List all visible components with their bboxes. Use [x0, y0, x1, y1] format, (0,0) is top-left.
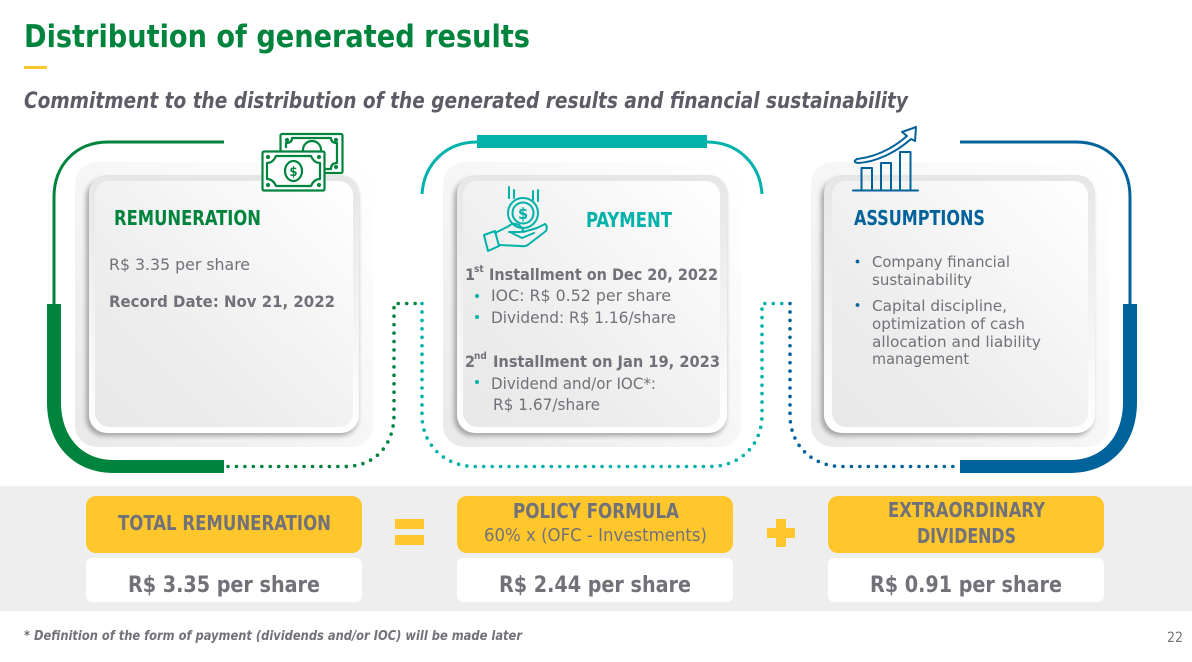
value: policy formula: R$ 2.44 per share [499, 573, 691, 598]
subtitle: Commitment to the distribution of the generated results and financial sustainability [24, 89, 909, 114]
value: total remuneration [86, 558, 362, 602]
value: extraordinary dividends [828, 558, 1104, 602]
text: first installment [465, 264, 718, 327]
text: second installment: nd [474, 351, 487, 362]
list: assumptions: management [872, 350, 970, 368]
icon: hand with coin: $ [518, 204, 528, 223]
title: Distribution of generated results [24, 19, 530, 55]
text: second installment: Installment on Jan 19, 2023 [493, 352, 720, 371]
list: assumptions [856, 253, 1041, 368]
text: first installment: Dividend: R$ 1.16/share [491, 308, 676, 327]
page number: 22 [1167, 630, 1183, 646]
box: total remuneration: TOTAL REMUNERATION [118, 511, 331, 535]
box: total remuneration [86, 496, 362, 553]
dotted connectors [228, 304, 958, 466]
icon: hand with coin [484, 187, 547, 251]
text: first installment: st [474, 264, 484, 275]
icon: growth chart [853, 127, 918, 190]
heading: remuneration: REMUNERATION [114, 206, 261, 230]
panel: assumptions [811, 162, 1109, 447]
text: second installment: R$ 1.67/share [493, 395, 600, 414]
icon: banknotes: $ [289, 165, 298, 180]
box: policy formula [457, 496, 733, 553]
box: policy formula: POLICY FORMULA [513, 499, 679, 523]
panel: payment [443, 162, 741, 447]
box: extraordinary dividends: DIVIDENDS [917, 524, 1016, 548]
box: extraordinary dividends: EXTRAORDINARY [888, 498, 1046, 522]
icon: equals sign [395, 519, 424, 545]
icon: banknotes [262, 134, 342, 190]
text: first installment: Installment on Dec 20, 2022 [489, 265, 718, 284]
heading: assumptions: ASSUMPTIONS [854, 206, 985, 230]
list: assumptions: Company financial [872, 253, 1010, 271]
value: total remuneration: R$ 3.35 per share [128, 573, 320, 598]
list: assumptions: optimization of cash [872, 315, 1025, 333]
text: first installment: IOC: R$ 0.52 per share [491, 286, 671, 305]
text: second installment [465, 351, 720, 414]
text: record date: Record Date: Nov 21, 2022 [109, 292, 335, 311]
band: formula [0, 486, 1192, 611]
value: extraordinary dividends: R$ 0.91 per share [870, 573, 1062, 598]
footnote: * Definition of the form of payment (dividends and/or IOC) will be made later [24, 629, 523, 644]
bracket: assumptions [960, 142, 1137, 473]
heading: payment: PAYMENT [586, 208, 673, 232]
list: assumptions: allocation and liability [872, 333, 1041, 351]
text: amount per share: R$ 3.35 per share [109, 255, 250, 274]
box: policy formula: 60% x (OFC - Investments) [484, 525, 707, 546]
title accent bar [24, 66, 47, 69]
box: extraordinary dividends [828, 496, 1104, 553]
bracket: payment [422, 135, 762, 194]
text: second installment: 2 [465, 352, 475, 371]
value: policy formula [457, 558, 733, 602]
list: assumptions: Capital discipline, [872, 297, 1007, 315]
text: second installment: Dividend and/or IOC*: [491, 374, 656, 393]
panel: remuneration [75, 162, 373, 447]
bracket: remuneration [47, 142, 224, 473]
list: assumptions: sustainability [872, 271, 972, 289]
text: first installment: 1 [465, 265, 475, 284]
icon: plus sign [767, 519, 795, 547]
